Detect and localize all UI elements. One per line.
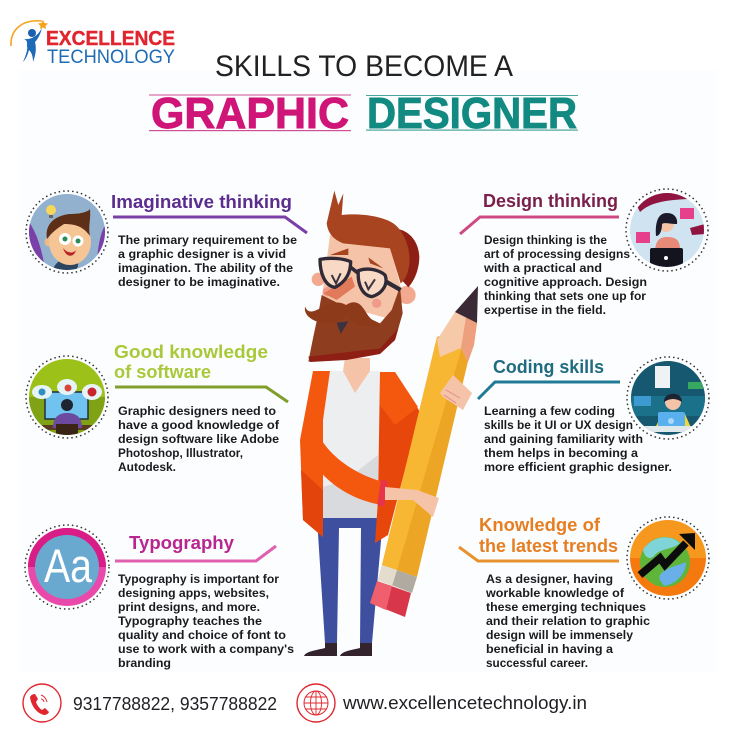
text block: design thinking: art of processing designs <box>484 247 630 261</box>
connector line: typography <box>115 546 276 561</box>
text block: trends: As a designer, having <box>486 572 613 586</box>
text block: coding skills <box>484 404 672 474</box>
illustration: designer holding a giant pencil <box>300 191 478 656</box>
text block: trends: these emerging techniques <box>486 600 646 614</box>
text block: typography: branding <box>118 656 171 670</box>
pencil <box>370 286 478 617</box>
icon: phone <box>23 684 61 722</box>
text block: design thinking: cognitive approach. Design <box>484 275 647 289</box>
head <box>305 191 419 362</box>
shirt <box>323 371 380 518</box>
back hair <box>395 228 419 287</box>
icon: Aa letters <box>25 525 109 609</box>
logo: Excellence Technology: EXCELLENCE <box>46 28 175 50</box>
arm and hand <box>301 375 472 517</box>
face <box>322 235 401 320</box>
panel: typography <box>25 525 294 670</box>
panel: imaginative thinking <box>26 191 307 289</box>
connector line: design thinking <box>460 217 619 234</box>
nose <box>323 277 355 300</box>
text block: trends: design will be immensely <box>486 628 633 642</box>
title: Skills to become a: SKILLS TO BECOME A <box>215 50 513 83</box>
heading: good knowledge of software: of software <box>114 362 211 382</box>
heading: good knowledge of software <box>114 342 268 382</box>
heading: knowledge of the latest trends <box>479 515 618 556</box>
logo: Excellence Technology <box>11 20 175 68</box>
icon: Aa letters: Aa <box>44 539 93 592</box>
heading: design thinking: Design thinking <box>483 191 618 211</box>
text block: typography <box>118 572 294 670</box>
connector line: software <box>115 387 288 402</box>
footer: phone contact <box>23 684 277 722</box>
text block: design thinking: with a practical and <box>483 261 602 275</box>
title: Graphic: GRAPHIC <box>151 89 349 138</box>
logo: Excellence Technology: TECHNOLOGY <box>47 47 175 68</box>
panel: good knowledge of software <box>26 342 288 474</box>
phone numbers: 9317788822, 9357788822 <box>73 694 277 714</box>
icon: coder with laptop <box>627 357 709 439</box>
text block: typography: Typography is important for <box>118 572 279 586</box>
icon: designer at monitor <box>26 356 108 438</box>
icon: boy with light bulb <box>26 191 108 273</box>
footer: website <box>297 684 587 722</box>
text block: software: Graphic designers need to <box>118 404 276 418</box>
icon: globe with rising arrow <box>627 517 709 599</box>
heading: knowledge of the latest trends: the latest trends <box>479 536 618 556</box>
icon: woman with laptop <box>626 189 708 271</box>
text block: typography: print designs, and more. <box>118 600 260 614</box>
text block: design thinking <box>483 233 647 317</box>
panel: coding skills <box>478 357 709 474</box>
eyebrows <box>330 248 383 268</box>
glasses <box>320 258 386 297</box>
text block: coding skills: skills be it UI or UX design <box>484 418 633 432</box>
beard <box>308 287 403 362</box>
connector line: coding skills <box>478 382 620 399</box>
text block: coding skills: them helps in becoming a <box>484 446 638 460</box>
text block: imaginative thinking: a graphic designer is a vivid <box>118 247 286 261</box>
jacket <box>300 371 420 543</box>
text block: coding skills: and gaining familiarity with <box>484 432 643 446</box>
website address: www.excellencetechnology.in <box>342 693 587 713</box>
heading: good knowledge of software: Good knowledge <box>114 342 268 362</box>
title: Designer: DESIGNER <box>367 89 577 138</box>
text block: software: design software like Adobe <box>118 432 279 446</box>
text block: imaginative thinking: designer to be imaginative. <box>118 275 280 289</box>
connector line: imaginative thinking <box>113 217 307 233</box>
text block: trends: workable knowledge of <box>485 586 625 600</box>
text block: software: Autodesk. <box>118 460 176 474</box>
text block: coding skills: Learning a few coding <box>484 404 615 418</box>
text block: trends: beneficial in having a <box>486 642 613 656</box>
neck and collar <box>343 358 370 393</box>
panel: design thinking <box>460 189 708 317</box>
text block: imaginative thinking: The primary requirement to be <box>118 233 297 247</box>
heading: knowledge of the latest trends: Knowledge of <box>479 515 601 535</box>
text block: software: Photoshop, Illustrator, <box>118 446 243 460</box>
text block: design thinking: thinking that sets one up for <box>484 289 646 303</box>
text block: typography: Typography teaches the <box>118 614 262 628</box>
text block: software: have a good knowledge of <box>118 418 280 432</box>
main hair <box>327 191 410 283</box>
heading: imaginative thinking: Imaginative thinking <box>111 192 292 212</box>
text block: typography: designing apps, websites, <box>118 586 269 600</box>
text block: imaginative thinking: imagination. The ability of the <box>118 261 293 275</box>
icon: globe <box>297 684 335 722</box>
connector line: trends <box>459 547 619 561</box>
text block: coding skills: more efficient graphic designer. <box>484 460 672 474</box>
panel: knowledge of the latest trends <box>459 515 709 670</box>
text block: trends: and their relation to graphic <box>486 614 650 628</box>
text block: design thinking: expertise in the field. <box>484 303 606 317</box>
text block: design thinking: Design thinking is the <box>484 233 607 247</box>
heading: coding skills: Coding skills <box>493 357 604 377</box>
text block: trends <box>485 572 650 670</box>
text block: software <box>118 404 280 474</box>
text block: typography: use to work with a company's <box>118 642 294 656</box>
text block: typography: quality and choice of font to <box>118 628 286 642</box>
moustache <box>305 302 381 327</box>
text block: trends: successful career. <box>486 656 588 670</box>
text block: imaginative thinking <box>118 233 297 289</box>
heading: typography: Typography <box>129 533 234 553</box>
legs <box>304 518 383 656</box>
